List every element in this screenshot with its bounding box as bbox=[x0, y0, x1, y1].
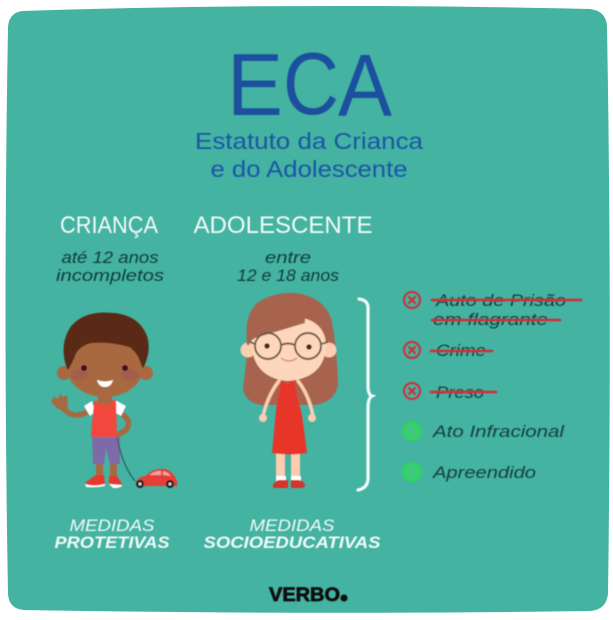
subtitle: Estatuto da Criança e do Adolescente bbox=[195, 128, 424, 182]
item: Auto de Prisão em flagrante: em flagrante bbox=[433, 310, 548, 329]
icon: x bbox=[404, 292, 420, 308]
caption: medidas protetivas bbox=[54, 516, 170, 552]
illustration: boy with toy car bbox=[51, 314, 177, 488]
boy sleeves bbox=[84, 400, 126, 416]
title: ECA: A bbox=[338, 36, 392, 135]
girl glasses bbox=[250, 333, 328, 359]
title: ECA: C bbox=[283, 34, 339, 133]
boy hair bbox=[65, 314, 147, 368]
brace bbox=[358, 299, 372, 490]
title: ECA: E bbox=[227, 35, 283, 134]
boy shirt bbox=[91, 400, 117, 437]
boy cheeks bbox=[71, 369, 89, 381]
boy mouth bbox=[97, 380, 113, 387]
girl socks and shoes bbox=[276, 476, 301, 481]
boy face bbox=[67, 339, 143, 397]
heading: Criança: CRIANÇA bbox=[60, 212, 159, 239]
item: Auto de Prisão em flagrante: Auto de Prisão bbox=[435, 291, 566, 310]
icon: x bbox=[404, 342, 420, 358]
girl dress bbox=[272, 379, 307, 454]
text: age range adolescent: entre bbox=[265, 248, 311, 267]
text: age range child: incompletos bbox=[56, 266, 165, 285]
toy car bbox=[136, 469, 177, 486]
heading: Adolescente: ADOLESCENTE bbox=[194, 212, 372, 239]
item: Ato Infracional: Ato Infracional bbox=[432, 422, 565, 441]
girl ears bbox=[240, 342, 256, 358]
girl face bbox=[251, 316, 326, 381]
boy eyes bbox=[81, 365, 87, 371]
item: Preso bbox=[431, 383, 496, 402]
boy legs bbox=[96, 464, 117, 476]
girl fringe bbox=[247, 294, 331, 345]
item: Crime: Crime bbox=[436, 341, 486, 360]
subtitle: Estatuto da Criança e do Adolescente: e do Adolescente bbox=[210, 156, 408, 182]
toy string bbox=[117, 437, 135, 481]
text: age range adolescent bbox=[237, 248, 340, 285]
illustration: girl with glasses bbox=[240, 293, 338, 488]
boy shorts bbox=[92, 437, 120, 465]
caption: medidas socioeducativas: SOCIOEDUCATIVAS bbox=[204, 533, 381, 552]
icon: check bbox=[402, 462, 422, 482]
girl legs bbox=[276, 452, 300, 478]
girl back hair bbox=[243, 293, 338, 405]
text: age range adolescent: 12 e 18 anos bbox=[237, 266, 340, 285]
caption: medidas protetivas: MEDIDAS bbox=[70, 516, 155, 535]
item: Auto de Prisão em flagrante bbox=[432, 291, 581, 329]
boy arms bbox=[62, 407, 88, 415]
girl eyes bbox=[264, 343, 270, 349]
boy ears bbox=[57, 366, 71, 380]
icon: check bbox=[402, 421, 422, 441]
girl smile bbox=[281, 358, 297, 361]
list: forbidden terms bbox=[402, 291, 581, 482]
girl arms bbox=[263, 381, 313, 416]
caption: medidas socioeducativas: MEDIDAS bbox=[250, 516, 335, 535]
text: age range child: até 12 anos bbox=[62, 248, 159, 267]
item: Preso: Preso bbox=[436, 383, 484, 402]
text: age range child bbox=[56, 248, 165, 285]
caption: medidas protetivas: PROTETIVAS bbox=[54, 533, 170, 552]
boy neck bbox=[98, 392, 112, 405]
icon: x bbox=[404, 383, 420, 399]
caption: medidas socioeducativas bbox=[204, 516, 381, 552]
title: ECA bbox=[227, 34, 392, 135]
boy shoes bbox=[85, 475, 105, 486]
item: Apreendido: Apreendido bbox=[432, 463, 536, 482]
subtitle: Estatuto da Criança e do Adolescente: Estatuto da Crianca bbox=[195, 128, 424, 154]
logo: Verbo: VERBO bbox=[269, 585, 340, 606]
girl hands bbox=[259, 414, 267, 422]
